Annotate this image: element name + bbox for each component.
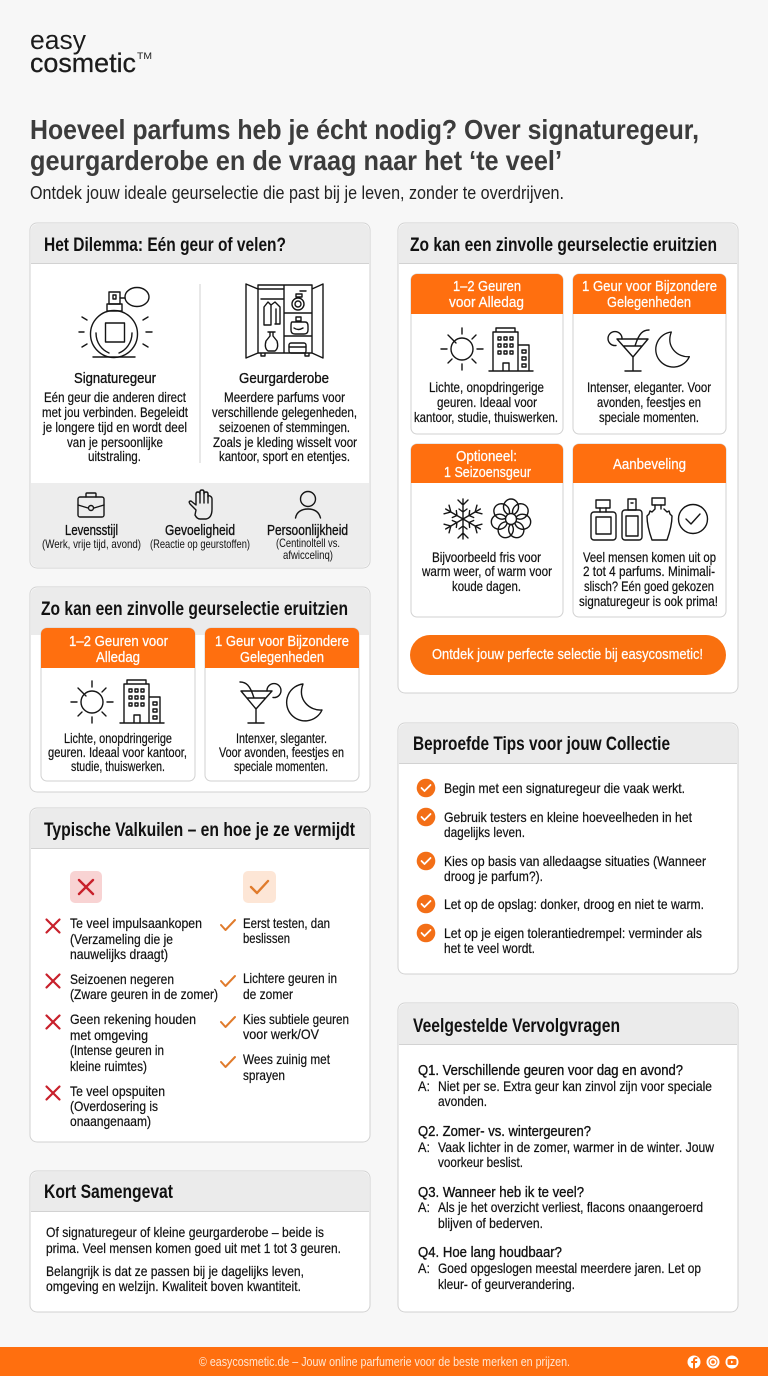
faq 3: Als je het overzicht verliest, flacons onaangeroerd (438, 1200, 703, 1215)
icon: briefcase (78, 493, 104, 517)
card title: 1–2 Geuren voor (69, 633, 168, 650)
summary text: omgeving en welzijn. Kwaliteit boven kwantiteit. (46, 1279, 301, 1294)
text block: signaturegeur: Signaturegeur (74, 371, 156, 387)
icon: moon (656, 332, 689, 367)
summary text: Belangrijk is dat ze passen bij je dagelijks leven, (46, 1264, 304, 1279)
panel: typische valkuilen (30, 808, 370, 1142)
card text (421, 550, 552, 594)
pitfall 1: nauwelijks draagt) (70, 947, 168, 962)
card title: 1 Geur voor Bijzondere (215, 633, 349, 650)
tip 4: Let op de opslag: donker, droog en niet te warm. (444, 897, 704, 912)
card: aanbeveling (573, 444, 726, 617)
faq 1: avonden. (438, 1094, 487, 1109)
icon: sun (71, 681, 113, 723)
pitfall 1: (Verzameling die je (70, 932, 173, 947)
text block: signaturegeur: uitstraling. (88, 449, 141, 464)
solution 1 (221, 916, 330, 946)
icon: sun (441, 328, 483, 370)
title: Hoeveel parfums heb je écht nodig? Over signaturegeur, (30, 114, 699, 145)
card: seizoensgeur (411, 444, 563, 617)
logo: TM (137, 51, 152, 62)
pitfall 3: kleine ruimtes) (70, 1059, 147, 1074)
tip 3 (417, 852, 706, 884)
factor: levensstijl (42, 523, 141, 551)
tip 2 (417, 808, 692, 840)
tip 3: droog je parfum?). (444, 869, 543, 884)
card title: Aanbeveling (613, 456, 686, 473)
card title: 1 Seizoensgeur (444, 464, 531, 481)
factor: persoonlijkheid (267, 523, 348, 562)
tip 4 (417, 895, 704, 913)
badge: wrong (70, 871, 102, 903)
icon: building (489, 328, 533, 371)
factor strip (31, 483, 369, 567)
card title: 1–2 Geuren (453, 278, 521, 295)
subtitle: Ontdek jouw ideale geurselectie die past bij je leven, zonder te overdrijven. (30, 182, 564, 203)
icon: cocktail (608, 330, 649, 371)
pitfall 3 (46, 1012, 196, 1074)
card text: kantoor, studie, thuiswerken. (414, 410, 558, 425)
card text: geuren. Ideaal voor kantoor, (48, 745, 187, 760)
solution 2 (221, 971, 337, 1002)
pitfall 4: (Overdosering is (70, 1099, 158, 1114)
solution 3: Kies subtiele geuren (243, 1012, 349, 1027)
factor: persoonlijkheid: (Centinoltell vs. (276, 536, 340, 550)
pitfall 3: met omgeving (70, 1028, 148, 1043)
icon: cocktail (240, 682, 281, 723)
card text: avonden, feestjes en (597, 395, 701, 410)
card text: signaturegeur is ook prima! (579, 594, 718, 609)
solution 4: sprayen (243, 1068, 285, 1083)
card text: Lichte, onopdringerige (64, 731, 172, 746)
logo: easy (30, 25, 86, 55)
card title: Gelegenheden (240, 649, 324, 666)
card text (587, 380, 711, 425)
pitfall 4 (46, 1084, 165, 1129)
text block: geurgarderobe: Geurgarderobe (239, 371, 329, 387)
card: bijzondere gelegenheden (573, 274, 726, 434)
tip 1: Begin met een signaturegeur die vaak werkt. (444, 781, 685, 796)
factor: levensstijl: (Werk, vrije tijd, avond) (42, 537, 141, 551)
card text (219, 731, 344, 774)
heading: Typische Valkuilen – en hoe je ze vermijdt (44, 819, 355, 841)
card text: koude dagen. (452, 579, 521, 594)
pitfall 2: (Zware geuren in de zomer) (70, 987, 218, 1002)
icon: perfume bottle (79, 288, 152, 358)
card title (449, 278, 524, 311)
tip 1 (417, 779, 685, 797)
title: geurgarderobe en de vraag naar het ‘te veel’ (30, 145, 562, 176)
footer bar (0, 1347, 768, 1376)
logo (30, 25, 152, 78)
icon: wardrobe (246, 284, 323, 358)
pitfall 4: onaangenaam) (70, 1114, 151, 1129)
icon: youtube (726, 1356, 738, 1368)
pitfall 3: (Intense geuren in (70, 1043, 164, 1058)
panel: kort samengevat (30, 1171, 370, 1312)
text block: geurgarderobe: Zoals je kleding wisselt voor (213, 435, 357, 450)
text block: geurgarderobe: kantoor, sport en etentjes. (219, 449, 350, 464)
faq 3: blijven of bederven. (438, 1216, 543, 1231)
panel: veelgestelde vervolgvragen (398, 1003, 738, 1312)
heading: het dilemma: Het Dilemma: Eén geur of velen? (44, 234, 286, 256)
tip 5 (417, 924, 702, 956)
card: bijzondere gelegenheden (205, 628, 359, 781)
pitfall 1: Te veel impulsaankopen (70, 916, 202, 931)
factor: gevoeligheid: (Reactie op geurstoffen) (150, 537, 250, 551)
title (30, 114, 699, 176)
card text: Intenxer, sleganter. (236, 731, 327, 746)
card text: Lichte, onopdringerige (429, 380, 544, 395)
tip 3: Kies op basis van alledaagse situaties (Wanneer (444, 854, 706, 869)
heading: Zo kan een zinvolle geurselectie eruitzien (41, 598, 348, 620)
icon: building (120, 680, 164, 723)
card title: Alledag (96, 649, 140, 666)
panel: beproefde tips (398, 723, 738, 974)
tip 2: dagelijks leven. (444, 825, 525, 840)
text block: signaturegeur: Eén geur die anderen direct (44, 390, 186, 405)
faq 4 (418, 1245, 701, 1292)
solution 3 (221, 1012, 349, 1042)
faq 1: Q1. Verschillende geuren voor dag en avond? (418, 1063, 683, 1079)
footer text: © easycosmetic.de – Jouw online parfumerie voor de beste merken en prijzen. (199, 1355, 570, 1369)
pitfall 3: Geen rekening houden (70, 1012, 196, 1027)
card text: studie, thuiswerken. (71, 759, 165, 774)
card text: speciale momenten. (234, 759, 328, 774)
faq 2: Q2. Zomer- vs. wintergeuren? (418, 1124, 591, 1140)
icon: person (296, 492, 320, 518)
faq 2: Vaak lichter in de zomer, warmer in de winter. Jouw (438, 1140, 714, 1155)
faq 1: A: (418, 1079, 430, 1094)
solution 4 (221, 1052, 330, 1083)
tip 5: het te veel wordt. (444, 941, 535, 956)
summary text: prima. Veel mensen komen goed uit met 1 tot 3 geuren. (46, 1241, 341, 1256)
pitfall 2 (46, 972, 218, 1002)
card title (444, 448, 531, 481)
card: alledag (411, 274, 563, 434)
icon: instagram (706, 1356, 720, 1368)
card text: Voor avonden, feestjes en (219, 745, 344, 760)
faq 4: Q4. Hoe lang houdbaar? (418, 1245, 562, 1261)
button: call to action: Ontdek jouw perfecte selectie bij easycosmetic! (432, 646, 703, 663)
solution 1: beslissen (243, 931, 290, 946)
tip 2: Gebruik testers en kleine hoeveelheden in het (444, 810, 692, 825)
faq 4: Goed opgeslogen meestal meerdere jaren. Let op (438, 1261, 701, 1276)
card: alledag (41, 628, 195, 781)
summary text (46, 1225, 341, 1294)
faq 1: Niet per se. Extra geur kan zinvol zijn voor speciale (438, 1079, 712, 1094)
faq 2: A: (418, 1140, 430, 1155)
card title (69, 633, 168, 666)
faq 3: A: (418, 1200, 430, 1215)
solution 2: de zomer (243, 987, 293, 1002)
text block: signaturegeur (42, 371, 188, 464)
card text (48, 731, 187, 774)
solution 1: Eerst testen, dan (243, 916, 330, 931)
faq 2: voorkeur beslist. (438, 1155, 523, 1170)
pitfall 1 (46, 916, 202, 962)
icon: facebook (688, 1356, 700, 1368)
text block: signaturegeur: van je persoonlijke (67, 435, 163, 450)
pitfall 2: Seizoenen negeren (70, 972, 174, 987)
solution 3: voor werk/OV (243, 1027, 319, 1042)
pitfall 4: Te veel opspuiten (70, 1084, 165, 1099)
faq 2 (418, 1124, 714, 1170)
faq 3: Q3. Wanneer heb ik te veel? (418, 1185, 584, 1201)
text block: geurgarderobe: seizoenen of stemmingen. (219, 420, 350, 435)
card text (414, 380, 558, 425)
button: call to action (410, 635, 726, 675)
faq 1 (418, 1063, 712, 1109)
factor: persoonlijkheid: afwiccelinq) (283, 548, 333, 562)
card text: Bijvoorbeeld fris voor (432, 550, 541, 565)
solution 2: Lichtere geuren in (243, 971, 337, 986)
icon: hand (189, 490, 212, 519)
card title: Gelegenheden (607, 294, 691, 311)
card title: 1 Geur voor Bijzondere (582, 278, 717, 295)
card text: warm weer, of warm voor (421, 564, 552, 579)
heading: Kort Samengevat (44, 1181, 173, 1203)
card text (579, 550, 718, 609)
text block: geurgarderobe: Meerdere parfums voor (224, 390, 345, 405)
panel: zinvolle geurselectie (links) (30, 587, 370, 792)
card text: geuren. Ideaal voor (437, 395, 537, 410)
card text: slisch? Eén goed gekozen (584, 579, 714, 594)
icon: snowflake (443, 499, 483, 539)
factor: levensstijl: Levensstijl (65, 523, 118, 539)
card text: speciale momenten. (599, 410, 699, 425)
text block: geurgarderobe: verschillende gelegenheden, (212, 405, 357, 420)
faq 3 (418, 1185, 703, 1231)
summary text: Of signaturegeur of kleine geurgarderobe – beide is (46, 1225, 324, 1240)
card title: Optioneel: (456, 448, 517, 465)
faq 4: A: (418, 1261, 430, 1276)
badge: right (243, 871, 276, 903)
icon: moon (287, 684, 322, 721)
text block: geurgarderobe (212, 371, 357, 464)
factor: gevoeligheid: Gevoeligheid (165, 523, 235, 539)
tip 5: Let op je eigen tolerantiedrempel: verminder als (444, 926, 702, 941)
card title (582, 278, 717, 311)
factor: gevoeligheid (150, 523, 250, 551)
card text: Intenser, eleganter. Voor (587, 380, 711, 395)
card text: Veel mensen komen uit op (583, 550, 716, 565)
icon: flower (490, 499, 532, 540)
faq 4: kleur- of geurverandering. (438, 1277, 575, 1292)
logo: cosmetic (30, 48, 136, 78)
text block: signaturegeur: met jou verbinden. Begeleidt (42, 405, 188, 420)
heading: Beproefde Tips voor jouw Collectie (413, 733, 670, 755)
panel: zinvolle geurselectie (rechts) (398, 223, 738, 693)
heading: Veelgestelde Vervolgvragen (413, 1015, 620, 1037)
panel: het dilemma (30, 223, 370, 568)
icon: bottles and check (591, 498, 708, 540)
factor: persoonlijkheid: Persoonlijkheid (267, 523, 348, 539)
card title: voor Alledag (449, 294, 524, 311)
text block: signaturegeur: je longere tijd en wordt deel (42, 420, 187, 435)
card text: 2 tot 4 parfums. Minimali- (583, 564, 715, 579)
solution 4: Wees zuinig met (243, 1052, 330, 1067)
card title (215, 633, 349, 666)
